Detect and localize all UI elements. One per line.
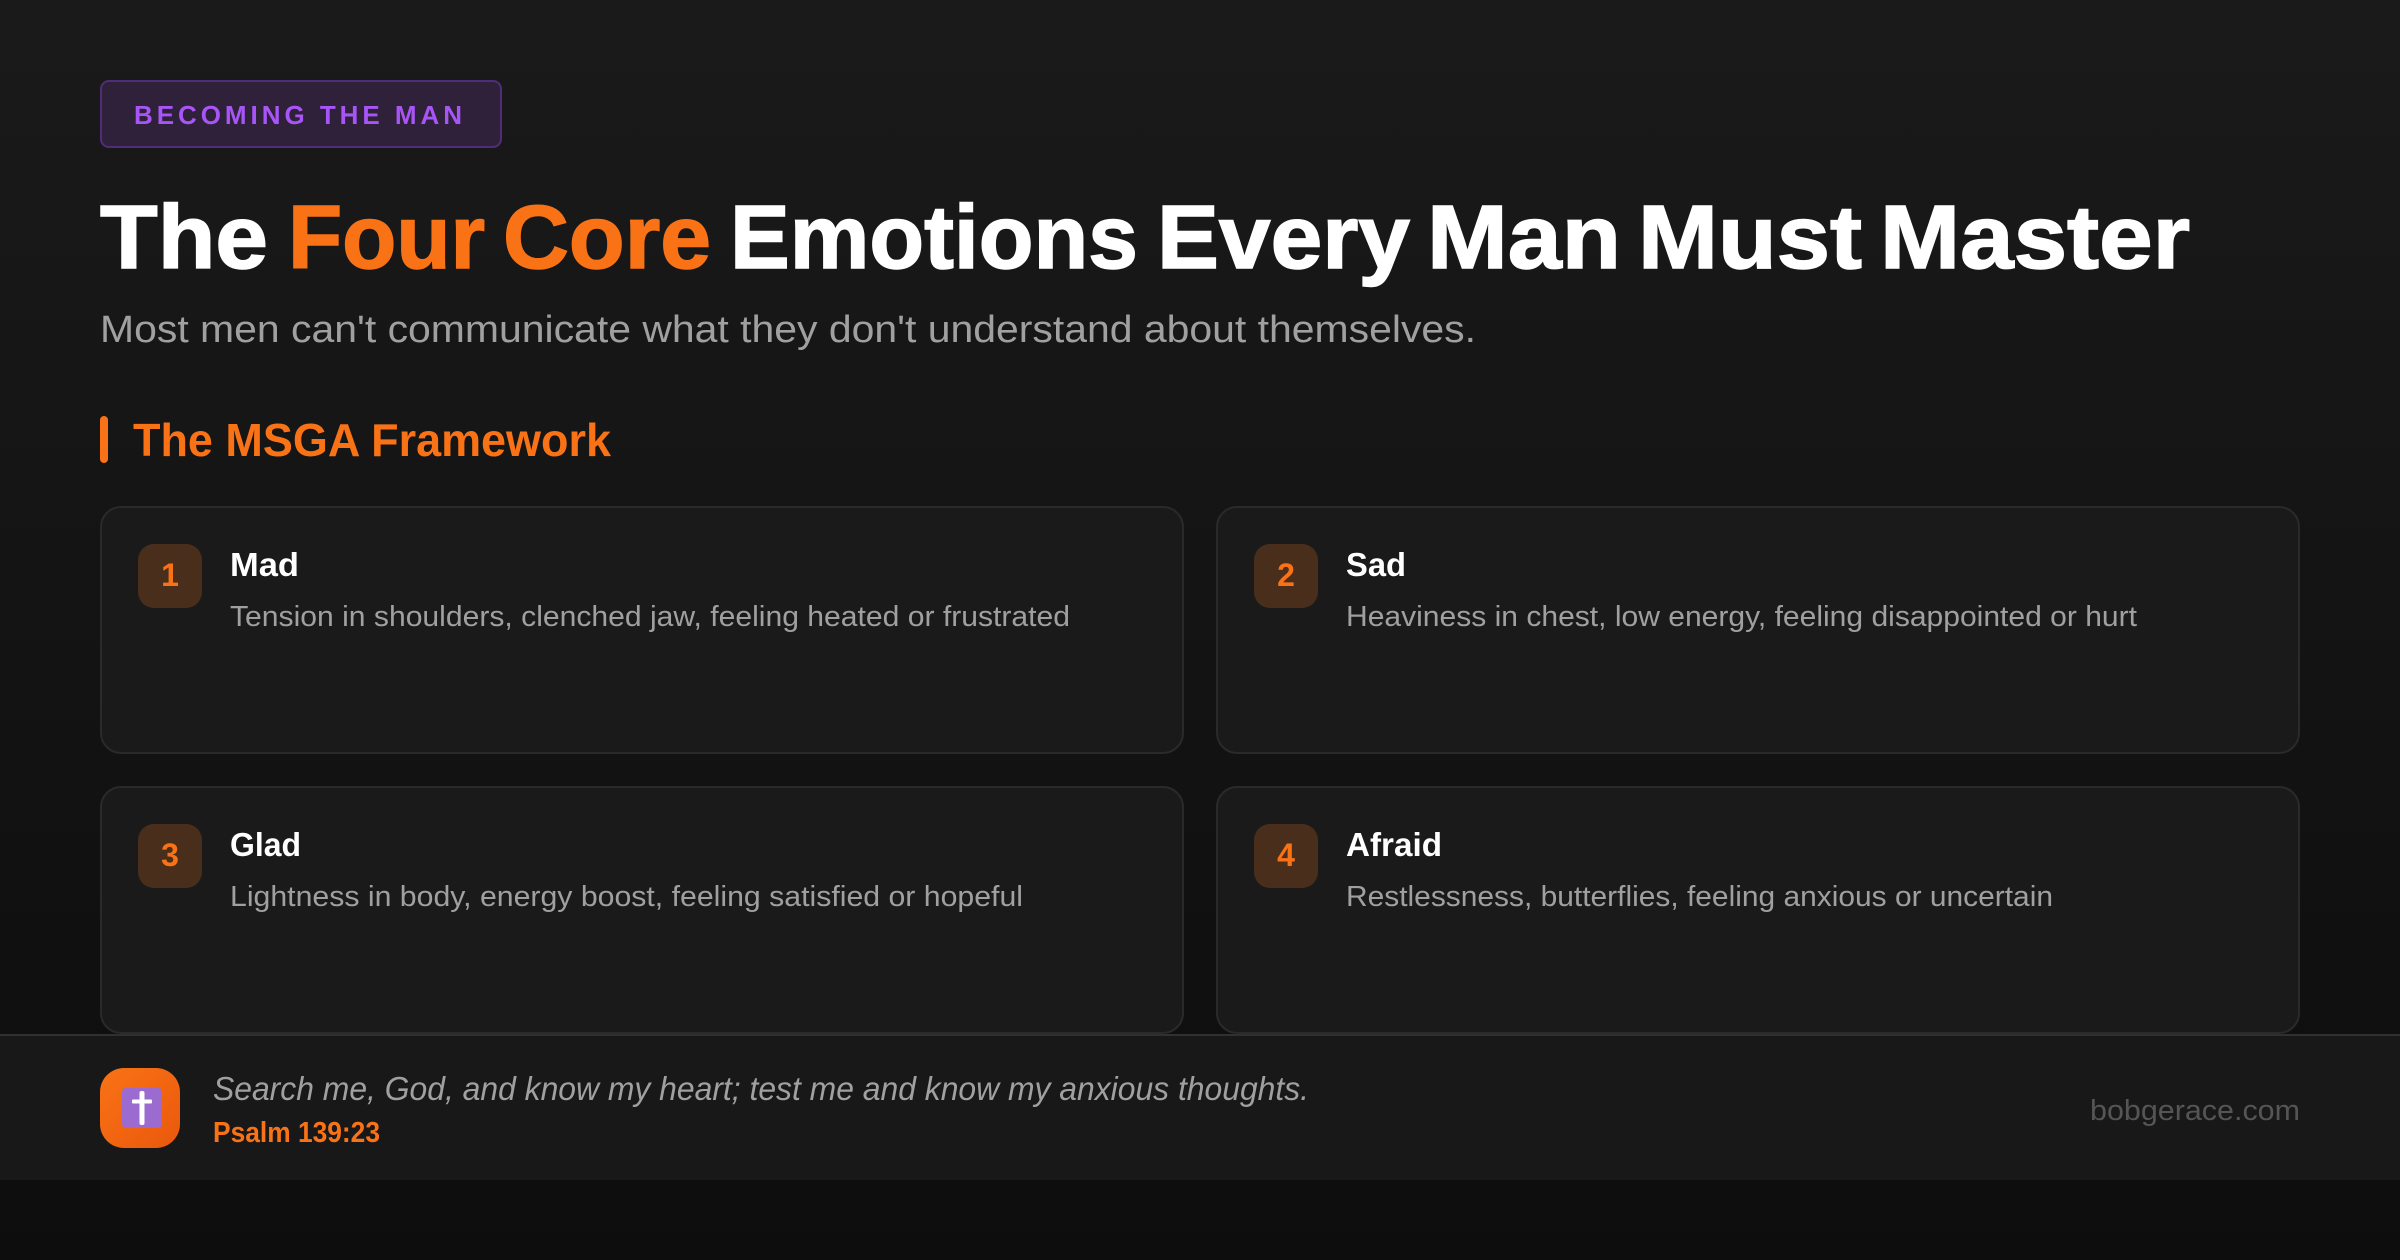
card: Afraid: Afraid [1346, 826, 1442, 863]
section heading: The MSGA Framework: The MSGA Framework [133, 414, 611, 466]
card: Glad: 3 [161, 837, 179, 873]
card: Sad: Sad [1346, 546, 1406, 583]
title: The [100, 188, 268, 288]
card: Glad: Glad [230, 826, 301, 863]
title: Core [503, 188, 711, 288]
card: Glad: Lightness in body, energy boost, feeling satisfied or hopeful [230, 881, 1023, 913]
scripture quote: Search me, God, and know my heart; test me and know my anxious thoughts. [213, 1070, 1309, 1107]
card: Mad: Tension in shoulders, clenched jaw, feeling heated or frustrated [230, 601, 1070, 633]
title [100, 188, 2190, 288]
title: Must [1638, 188, 1862, 288]
title: Every [1157, 188, 1410, 288]
icon: cross [100, 1068, 180, 1148]
title: Four [288, 188, 485, 288]
subtitle: Most men can't communicate what they don't understand about themselves. [100, 309, 1476, 351]
card: Glad [101, 787, 1183, 1033]
card: Mad: Mad [230, 546, 299, 583]
card: Afraid: 4 [1277, 837, 1295, 873]
card: Afraid [1217, 787, 2299, 1033]
title: Man [1427, 188, 1621, 288]
card: Mad: 1 [161, 557, 179, 593]
card: Afraid: Restlessness, butterflies, feeling anxious or uncertain [1346, 881, 2053, 913]
card: Mad [101, 507, 1183, 753]
card: Sad [1217, 507, 2299, 753]
footer bar [0, 1034, 2400, 1180]
title: Emotions [730, 188, 1138, 288]
tag: Becoming the Man [101, 81, 501, 147]
title: Master [1880, 188, 2190, 288]
scripture reference: Psalm 139:23 [213, 1117, 380, 1149]
website: bobgerace.com [2090, 1095, 2300, 1127]
card: Sad: 2 [1277, 557, 1295, 593]
card: Sad: Heaviness in chest, low energy, feeling disappointed or hurt [1346, 601, 2137, 633]
tag: Becoming the Man: BECOMING THE MAN [134, 100, 462, 130]
